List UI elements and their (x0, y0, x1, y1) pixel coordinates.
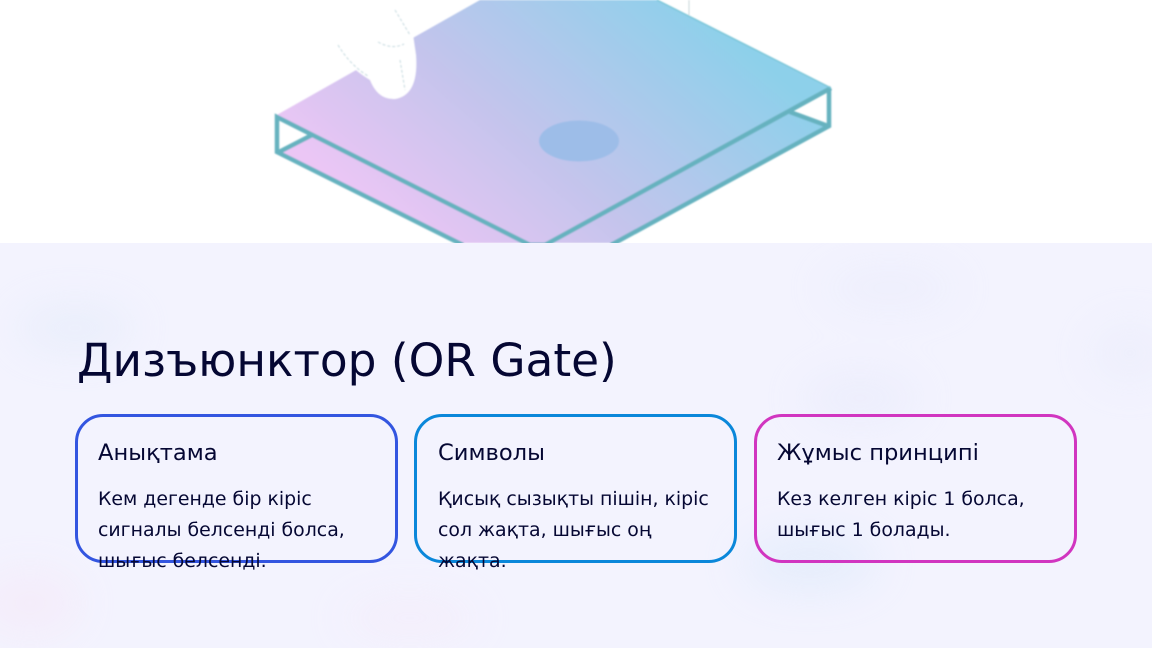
text block: жақта. (438, 550, 507, 572)
text block: Кез келген кіріс 1 болса, (777, 488, 1025, 510)
text block: шығыс 1 болады. (777, 519, 951, 541)
card: symbol (414, 414, 737, 572)
heading: Жұмыс принципі (777, 440, 979, 466)
title: Дизъюнктор (OR Gate) (77, 334, 617, 387)
text block (98, 488, 345, 572)
text block (438, 488, 709, 572)
heading: Символы (438, 440, 545, 466)
text block: Қисық сызықты пішін, кіріс (438, 488, 709, 510)
background panel (0, 243, 1152, 648)
card: definition (75, 414, 398, 572)
text block: сигналы белсенді болса, (98, 519, 345, 541)
text block: сол жақта, шығыс оң (438, 519, 651, 541)
illustration: isometric plate (274, 0, 833, 243)
text block (777, 488, 1025, 541)
icon: white hand (337, 0, 416, 99)
heading: Анықтама (98, 440, 218, 466)
text block: Кем дегенде бір кіріс (98, 488, 312, 510)
text block: шығыс белсенді. (98, 550, 267, 572)
card: working principle (754, 414, 1077, 563)
